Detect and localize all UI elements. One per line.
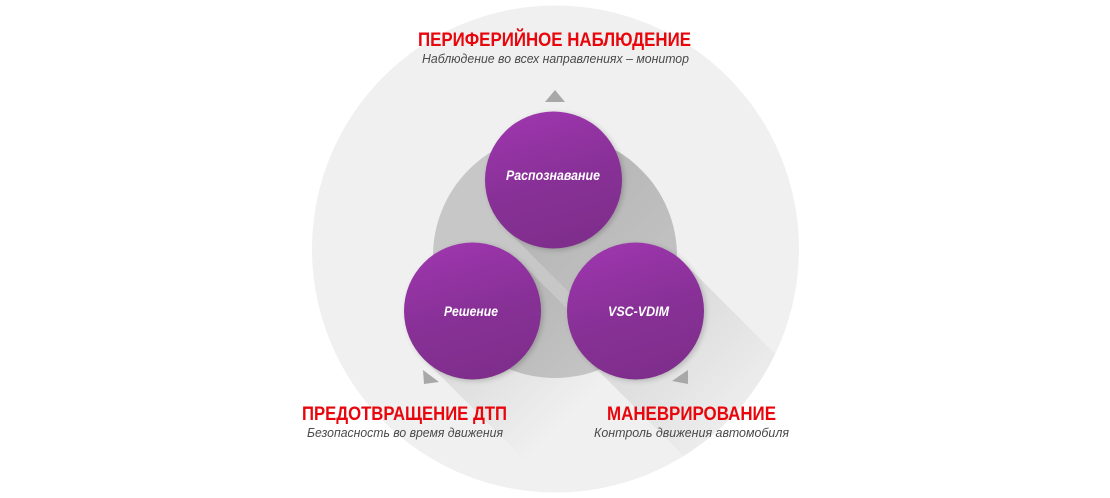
heading: top [418,29,691,66]
heading: bottom right [594,404,789,440]
background disc [312,6,799,492]
heading: bottom right: Контроль движения автомобиля [594,425,789,440]
heading: bottom left: Безопасность во время движения [307,425,503,440]
long shadow: top circle [510,150,669,292]
heading: top: ПЕРИФЕРИЙНОЕ НАБЛЮДЕНИЕ [418,29,691,51]
long shadow: left circle [426,266,570,425]
circle: VSC-VDIM [567,242,706,380]
heading: bottom left: ПРЕДОТВРАЩЕНИЕ ДТП [302,404,507,425]
central grey disc [433,134,677,378]
circle: Распознавание [485,112,624,250]
arrow: top [545,90,565,102]
arrow: bottom right [672,370,688,384]
long shadow: right circle [590,266,760,436]
heading: bottom left [302,404,507,440]
arrow: bottom left [423,370,439,384]
heading: bottom right: МАНЕВРИРОВАНИЕ [607,404,776,425]
heading: top: Наблюдение во всех направлениях – монитор [422,51,689,66]
circle: Решение: Решение [444,304,498,319]
circle: VSC-VDIM: VSC-VDIM [608,304,670,319]
circle: Решение [404,242,542,380]
circle: Распознавание: Распознавание [506,168,600,183]
